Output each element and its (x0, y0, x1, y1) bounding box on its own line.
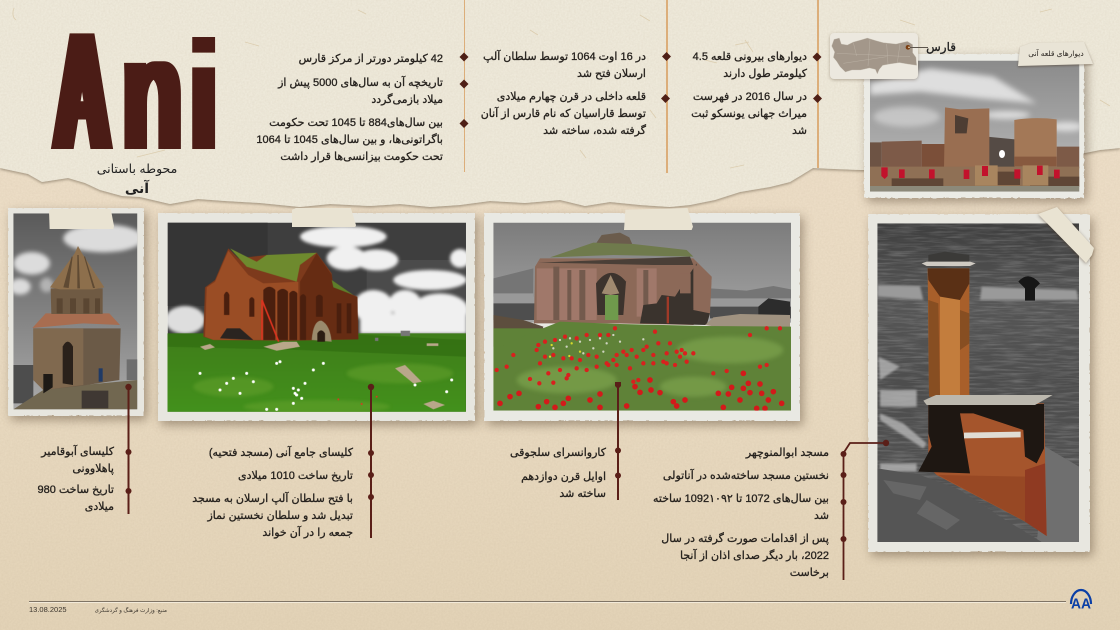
text block: column three (691, 51, 808, 137)
caption: second photo: تبدیل شد و سلطان نخستین نماز (207, 510, 353, 522)
caption: fourth photo: مسجد ابوالمنوچهر (746, 447, 829, 459)
logo: AA: AA (1071, 596, 1091, 612)
tape: first photo (49, 209, 114, 229)
tag: castle walls label: دیوارهای قلعه آنی (1028, 49, 1084, 58)
caption: second photo (192, 446, 354, 539)
subtitle: محوطه باستانی (97, 162, 177, 176)
text block: column three: میراث جهانی یونسکو ثبت (691, 108, 807, 120)
caption: second photo: با فتح سلطان آلپ ارسلان به مسجد (192, 493, 353, 505)
tape: fourth photo (1037, 206, 1096, 265)
text block: column two (481, 50, 646, 137)
subtitle (97, 162, 177, 196)
caption: first photo: میلادی (85, 501, 114, 513)
caption: first photo: پاهلاوونی (72, 463, 114, 475)
divider line: column one (464, 0, 465, 172)
text block: column three: دیوارهای بیرونی قلعه 4.5 (693, 51, 807, 63)
tag: castle walls label (1017, 42, 1094, 68)
caption: second photo: تاریخ ساخت 1010 میلادی (238, 470, 353, 482)
text block: column two: در 16 اوت 1064 توسط سلطان آلپ (483, 51, 646, 63)
subtitle: آنی (125, 180, 149, 196)
photo: Seljuk caravanserai (481, 211, 809, 431)
photo: Abughamrents church (5, 206, 153, 426)
title: Ani: i (190, 9, 218, 182)
caption: third photo: اوایل قرن دوازدهم (521, 471, 606, 483)
tape: third photo (624, 208, 693, 230)
caption: third photo: ساخته شد (559, 488, 606, 500)
bullets: column one (460, 52, 468, 128)
text block: column one: میلاد بازمی‌گردد (371, 94, 443, 106)
footer: source: منبع: وزارت فرهنگ و گردشگری (95, 608, 167, 614)
caption: fourth photo: برخاست (790, 567, 829, 579)
text block: column two: توسط قاراسیان که نام قارس از آنان (481, 108, 646, 120)
caption: first photo: تاریخ ساخت 980 (37, 484, 114, 496)
photo: Abu'l Manuchihr mosque (865, 212, 1099, 562)
text block: column one (256, 53, 443, 163)
text block: column two: ارسلان فتح شد (577, 68, 646, 80)
divider line: column two (666, 0, 668, 173)
text block: column one: تاریخچه آن به سال‌های 5000 پیش از (278, 77, 443, 89)
caption: fourth photo: پس از اقدامات صورت گرفته در سال (661, 533, 829, 545)
map card: Turkey (828, 32, 920, 82)
text block: column two: گرفته شده، ساخته شد (543, 125, 646, 137)
connector: second photo (368, 384, 374, 538)
title: Ani: n (122, 2, 183, 184)
caption: fourth photo (653, 447, 829, 579)
logo: AA (1070, 588, 1092, 612)
caption: third photo (510, 447, 606, 500)
connector: fourth photo (840, 440, 890, 580)
text block: column three: در سال 2016 در فهرست (693, 91, 807, 103)
caption: first photo: کلیسای آبوقامیر (41, 446, 114, 458)
footer rule (29, 601, 1066, 602)
divider line: column three (817, 0, 818, 168)
caption: fourth photo: شد (814, 510, 829, 522)
text block: column three: کیلومتر طول دارند (723, 68, 807, 80)
text block: column one: باگراتونی‌ها، و بین سال‌های 1045 تا 1064 (256, 134, 443, 146)
tape: second photo (292, 208, 356, 227)
connector: first photo (125, 384, 132, 514)
title: Ani: A (55, 0, 109, 185)
connector: third photo (615, 382, 621, 500)
text block: column two: قلعه داخلی در قرن چهارم میلادی (497, 91, 646, 103)
map label: Kars: قارس (926, 40, 956, 54)
caption: first photo (37, 444, 114, 513)
caption: second photo: جمعه را در آن خواند (262, 527, 353, 539)
text block: column three: شد (792, 125, 807, 137)
caption: fourth photo: 2022، بار دیگر صدای اذان از آنجا (680, 550, 829, 562)
footer: date: 13.08.2025 (29, 605, 67, 614)
text block: column one: 42 کیلومتر دورتر از مرکز قارس (299, 53, 443, 65)
title: Ani (50, 0, 218, 185)
bullets: column three (812, 52, 822, 103)
text block: column one: بین سال‌های884 تا 1045 تحت حکومت (269, 117, 443, 129)
caption: fourth photo: بین سال‌های 1072 تا 1092۱۰۹۲ ساخته (653, 493, 829, 505)
text block: column one: تحت حکومت بیزانسی‌ها قرار داشت (280, 151, 443, 163)
caption: second photo: کلیسای جامع آنی (مسجد فتحیه) (209, 447, 353, 459)
photo: castle walls (860, 52, 1094, 208)
caption: fourth photo: نخستین مسجد ساخته‌شده در آناتولی (663, 470, 829, 482)
caption: third photo: کاروانسرای سلجوقی (510, 447, 606, 459)
bullets: column two (661, 52, 671, 103)
photo: Ani cathedral (155, 211, 484, 431)
